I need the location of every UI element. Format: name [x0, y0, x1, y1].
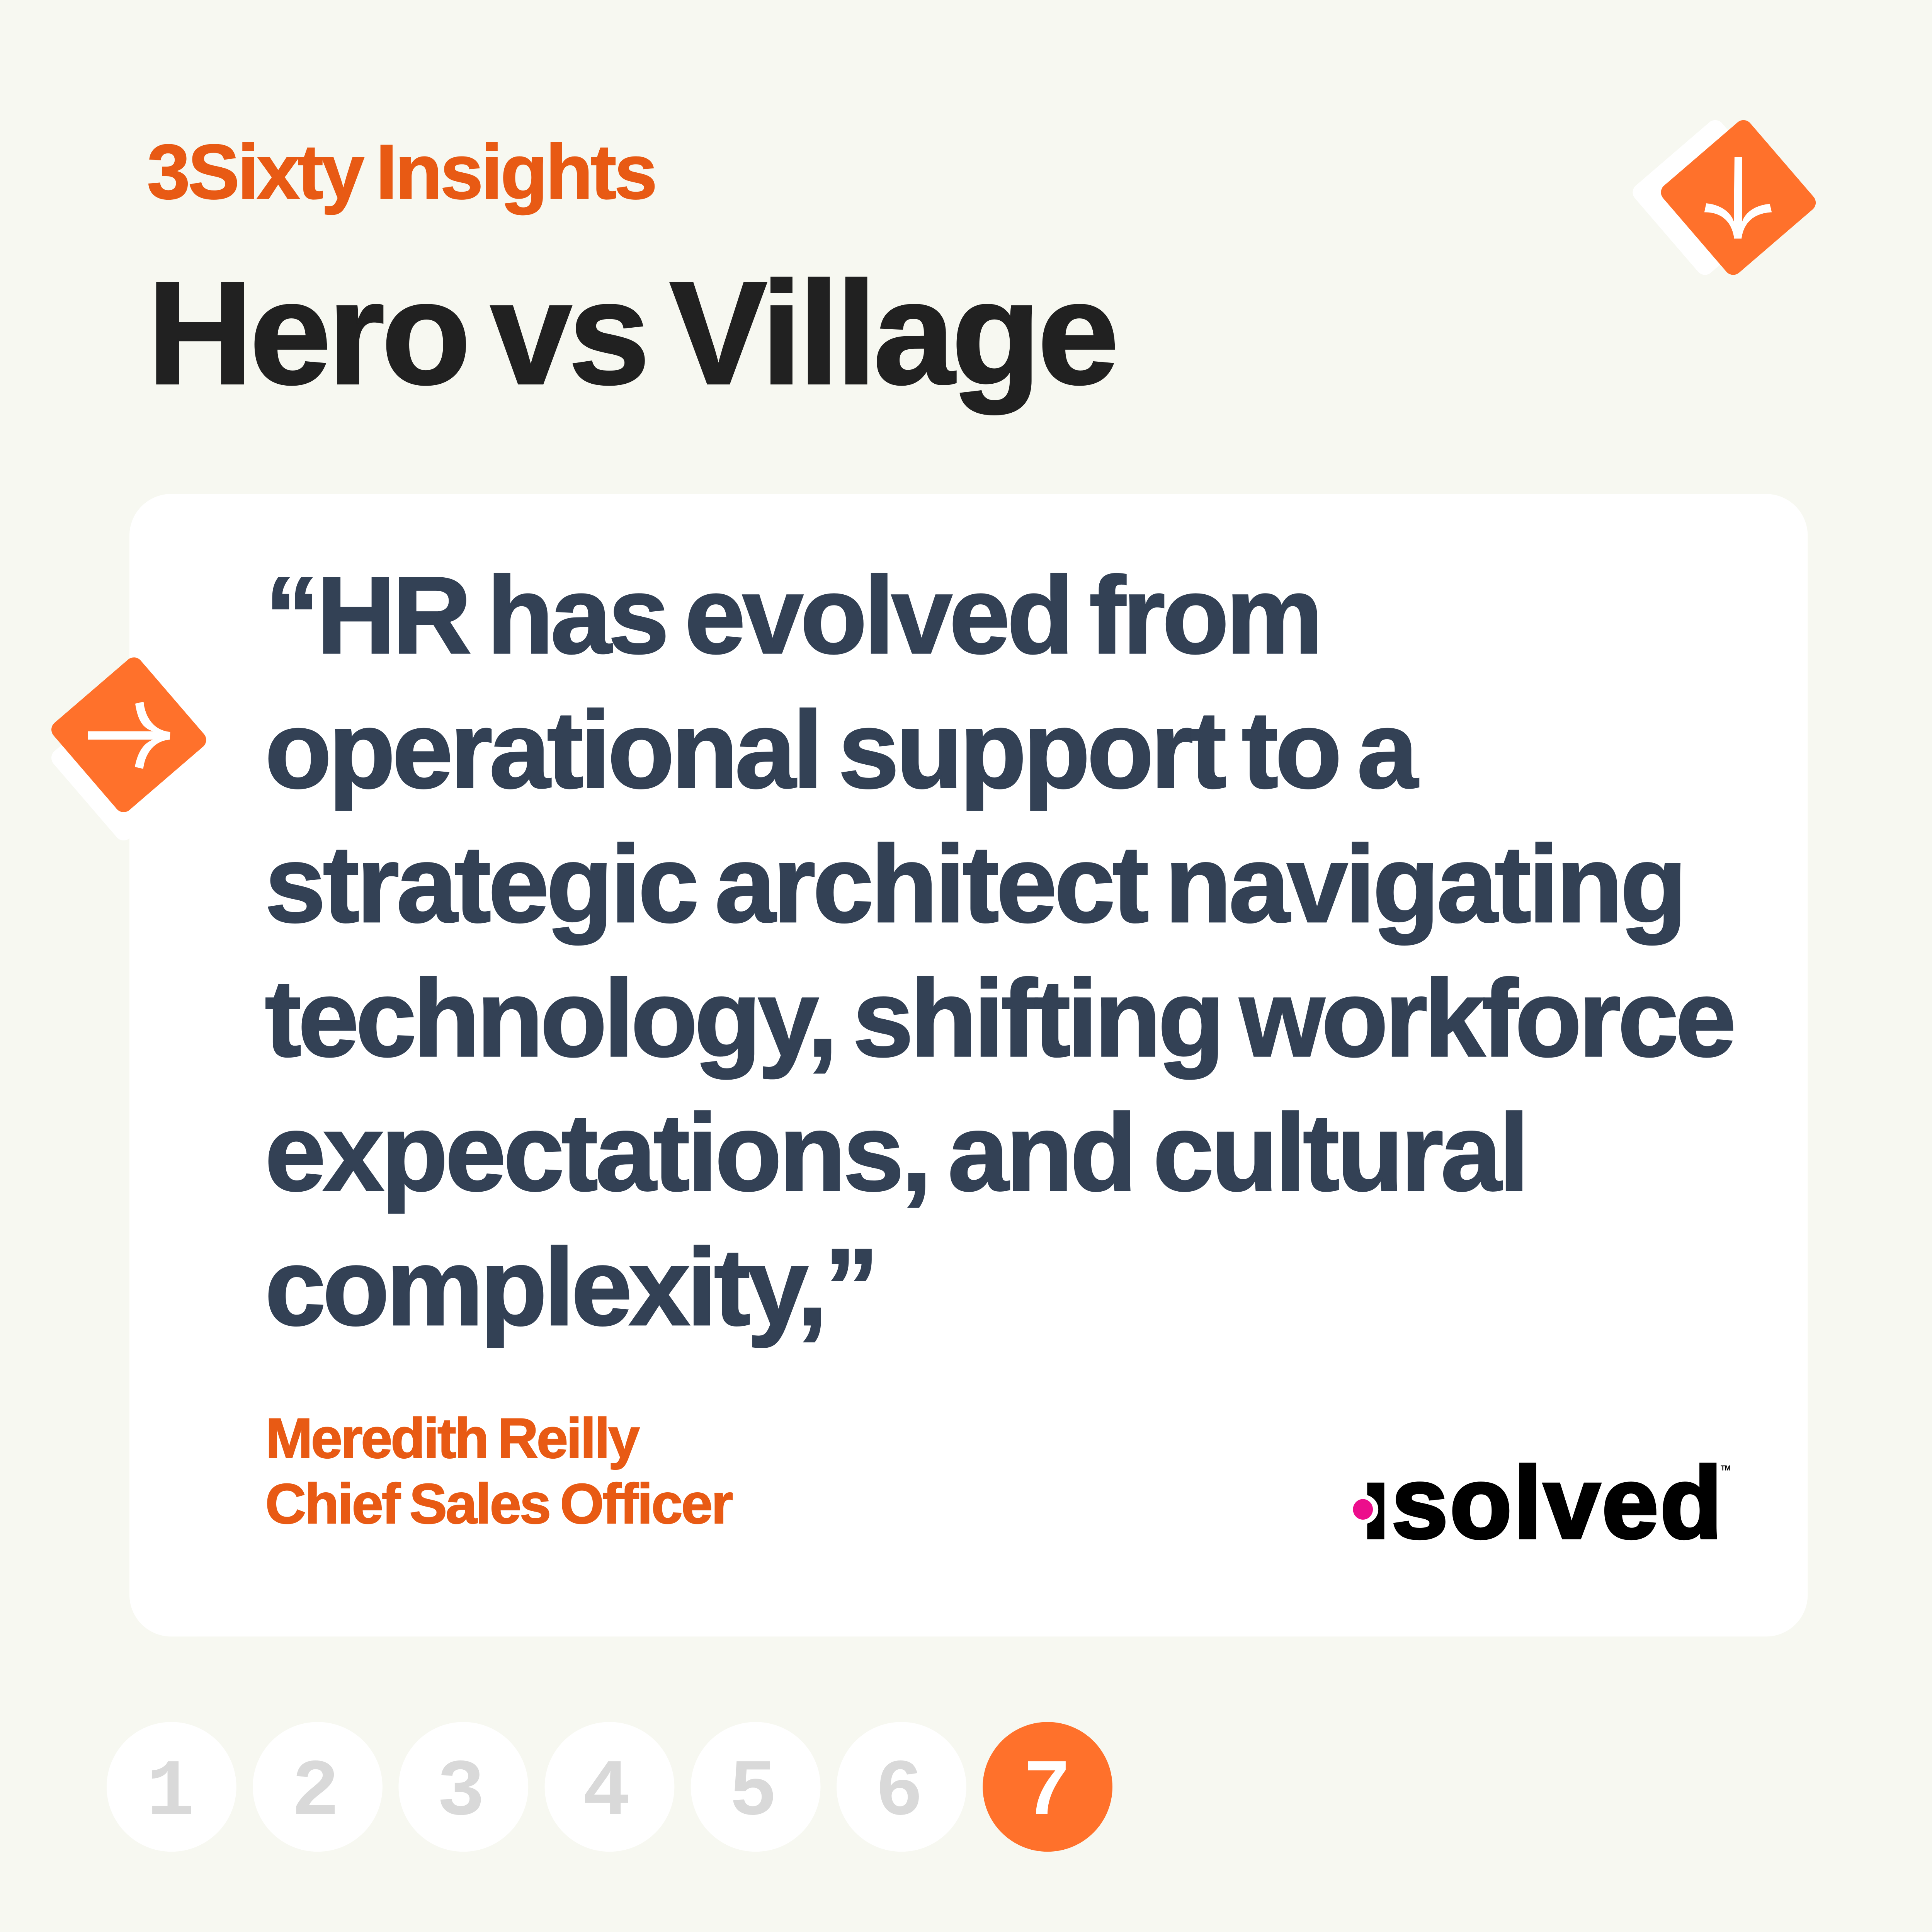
- icon: orange diamond with right arrow: [48, 654, 210, 844]
- step 6: 6: [875, 1748, 923, 1838]
- pagination: numbered steps: [107, 1722, 1112, 1852]
- quote text: complexity,”: [265, 1226, 879, 1349]
- step 4: [545, 1722, 674, 1852]
- step 5: [691, 1722, 821, 1852]
- step 5: 5: [729, 1748, 777, 1838]
- step 1: 1: [146, 1748, 195, 1838]
- attribution: [265, 1406, 733, 1535]
- step 7 active: 7: [1023, 1748, 1071, 1838]
- step 7 active: [983, 1722, 1112, 1852]
- quote text: operational support to a: [265, 689, 1418, 811]
- title: Hero vs Village: Hero vs Village: [147, 252, 1119, 415]
- step 2: 2: [291, 1748, 340, 1838]
- quote text: “HR has evolved from: [265, 554, 1323, 676]
- step 2: [253, 1722, 383, 1852]
- quote text: strategic architect navigating: [265, 823, 1687, 946]
- step 3: [398, 1722, 528, 1852]
- panel: quote card: [129, 494, 1808, 1636]
- logo: isolved: ısolved: [1362, 1446, 1722, 1559]
- step 6: [837, 1722, 966, 1852]
- icon: orange diamond with down arrow: [1629, 116, 1820, 279]
- step 1: [107, 1722, 236, 1852]
- attribution: Chief Sales Officer: [265, 1472, 733, 1535]
- step 4: 4: [582, 1748, 630, 1838]
- logo: isolved: TM: [1721, 1464, 1731, 1472]
- quote text: [265, 554, 1736, 1349]
- eyebrow: 3Sixty Insights: 3Sixty Insights: [147, 129, 657, 215]
- step 3: 3: [437, 1748, 485, 1838]
- quote text: expectations, and cultural: [265, 1091, 1529, 1214]
- quote text: technology, shifting workforce: [265, 957, 1736, 1080]
- attribution: Meredith Reilly: [265, 1406, 640, 1469]
